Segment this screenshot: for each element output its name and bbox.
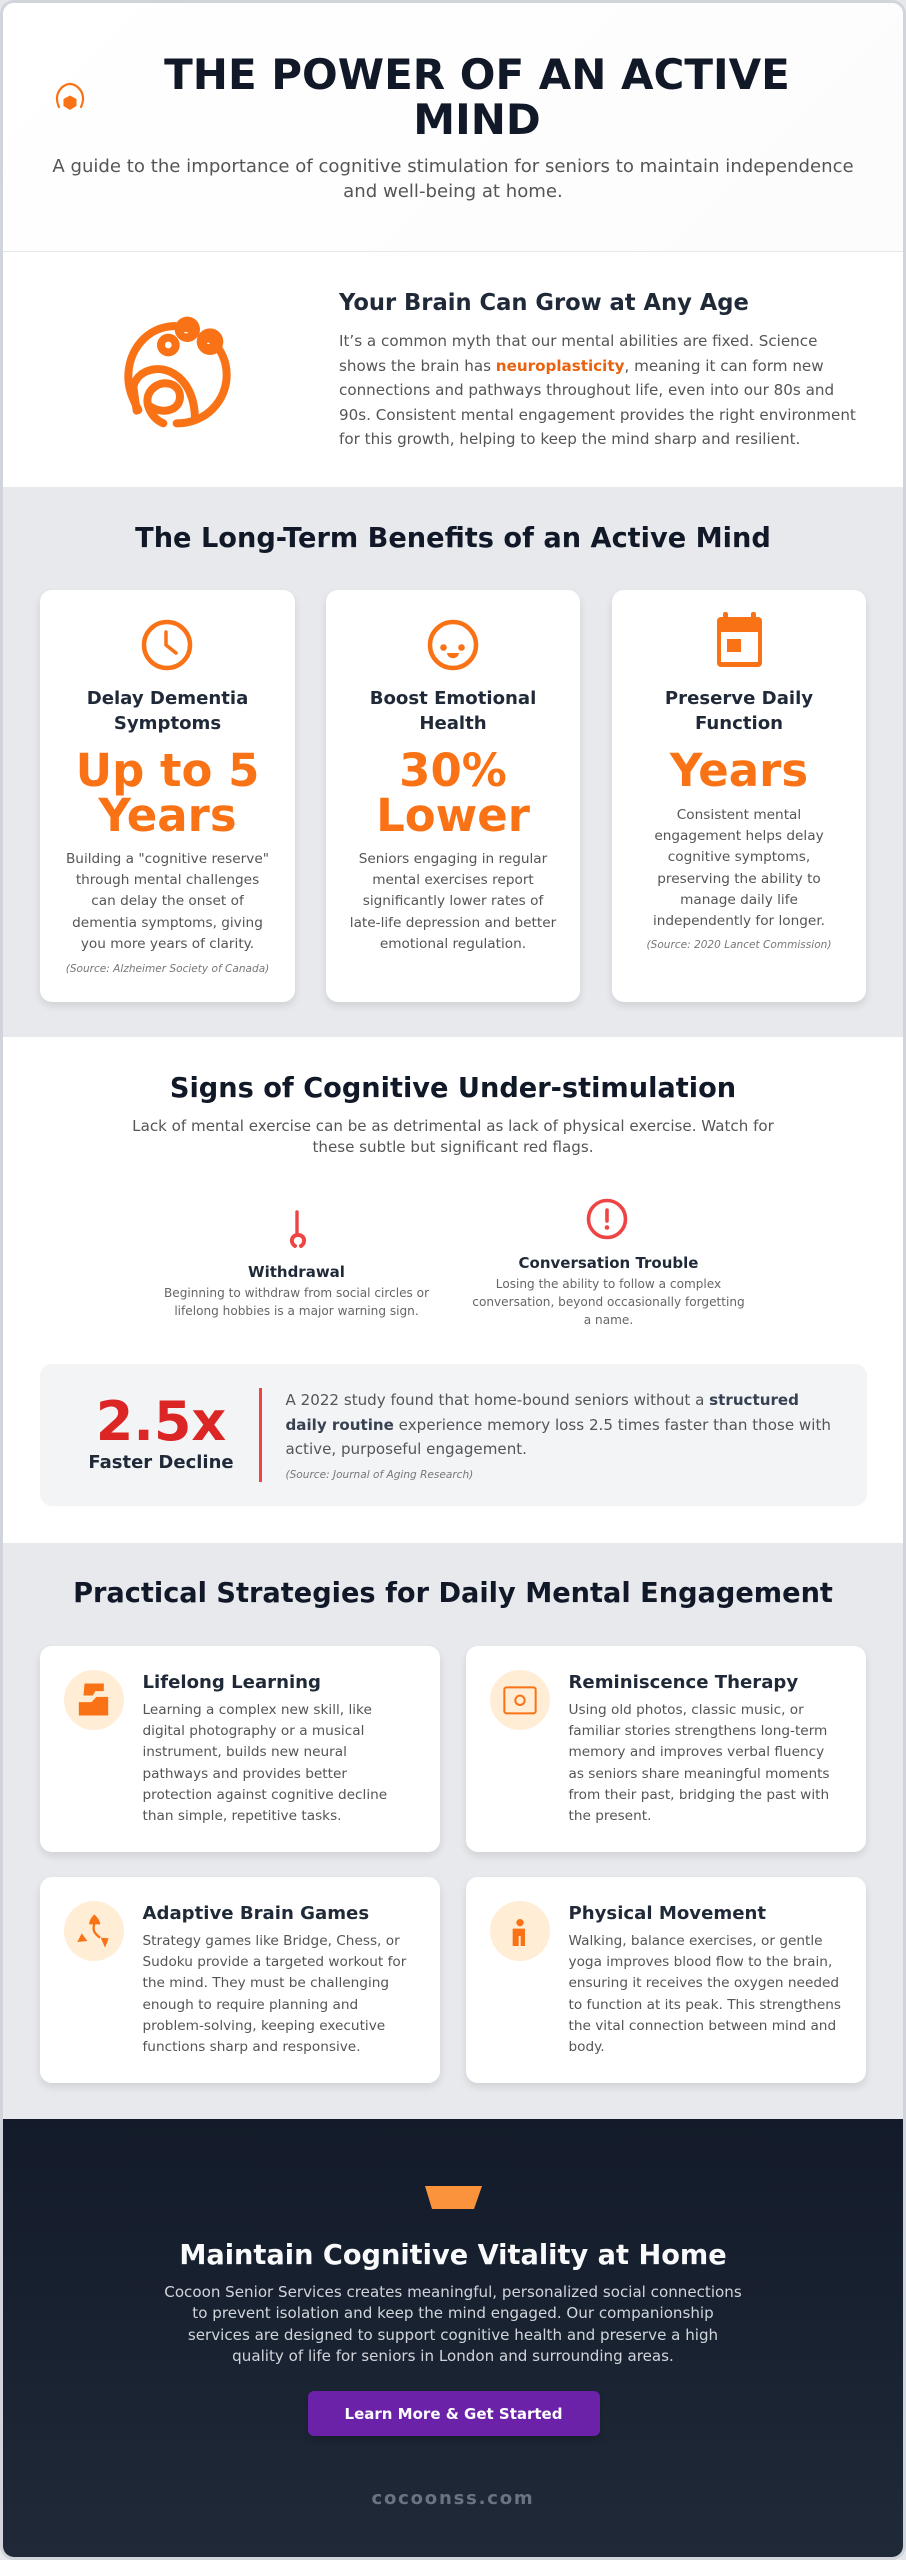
stat <box>376 744 530 842</box>
card: brain games <box>40 1877 440 2083</box>
heading: Practical Strategies for Daily Mental Engagement <box>73 1578 833 1609</box>
card title: Function <box>695 712 783 734</box>
panel: signs of under-stimulation <box>3 1037 903 1543</box>
description <box>142 1702 387 1824</box>
description: familiar stories strengthens long-term <box>568 1723 827 1739</box>
sign description: Losing the ability to follow a complex <box>496 1277 721 1291</box>
website: cocoonss.com <box>372 2488 534 2509</box>
card: daily function <box>612 590 866 1002</box>
panel: brain can grow <box>3 252 903 487</box>
card: reminiscence therapy <box>466 1646 866 1852</box>
description: functions sharp and responsive. <box>142 2039 361 2055</box>
icon: brain <box>124 316 231 428</box>
stat: Up to 5 <box>76 744 259 797</box>
paragraph: It’s a common myth that our mental abilities are fixed. Science <box>339 332 817 350</box>
card title: Adaptive Brain Games <box>142 1902 369 1924</box>
description: Learning a complex new skill, like <box>142 1702 372 1718</box>
paragraph: for this growth, helping to keep the mind sharp and resilient. <box>339 430 800 448</box>
sign: withdrawal <box>164 1210 430 1318</box>
source: (Source: Alzheimer Society of Canada) <box>66 963 269 975</box>
card title: Boost Emotional <box>370 688 536 709</box>
study text: daily routine experience memory loss 2.5 times faster than those with <box>286 1416 831 1434</box>
paragraph: services are designed to support cognitive health and preserve a high <box>188 2326 718 2344</box>
subtitle: and well-being at home. <box>343 180 563 202</box>
heading: Signs of Cognitive Under-stimulation <box>170 1073 736 1104</box>
description: Walking, balance exercises, or gentle <box>568 1933 823 1949</box>
description: significantly lower rates of <box>363 893 543 909</box>
description: Sudoku provide a targeted workout for <box>142 1954 406 1970</box>
icon: alert <box>586 1198 628 1240</box>
divider <box>259 1388 262 1482</box>
study text: active, purposeful engagement. <box>286 1440 527 1458</box>
sign description <box>472 1277 745 1327</box>
sign: conversation trouble <box>472 1198 745 1327</box>
description: emotional regulation. <box>380 936 526 952</box>
paragraph: quality of life for seniors in London and surrounding areas. <box>232 2347 674 2365</box>
description: Building a "cognitive reserve" <box>66 851 269 867</box>
heading: The Long-Term Benefits of an Active Mind <box>135 523 771 554</box>
source: (Source: Journal of Aging Research) <box>286 1469 473 1481</box>
description: Seniors engaging in regular <box>359 851 547 867</box>
sign description <box>164 1286 430 1318</box>
icon: photo <box>490 1670 550 1730</box>
panel: header <box>3 3 903 252</box>
subtitle: A guide to the importance of cognitive stimulation for seniors to maintain independence <box>52 156 854 177</box>
icon: withdrawal <box>290 1210 306 1248</box>
heading: Maintain Cognitive Vitality at Home <box>179 2240 727 2271</box>
description: Consistent mental <box>677 807 801 823</box>
title: MIND <box>413 95 541 144</box>
card title <box>370 688 536 734</box>
sign title: Withdrawal <box>248 1263 345 1281</box>
description: mental exercises report <box>372 872 534 888</box>
intro text: Lack of mental exercise can be as detrimental as lack of physical exercise. Watch for <box>132 1117 774 1135</box>
intro text <box>132 1117 774 1156</box>
paragraph <box>164 2283 742 2365</box>
description: to function at its peak. This strengthens <box>568 1997 841 2013</box>
description: yoga improves blood flow to the brain, <box>568 1954 832 1970</box>
callout: faster decline <box>40 1364 867 1506</box>
card: delay dementia <box>40 590 295 1002</box>
description: ensuring it receives the oxygen needed <box>568 1975 839 1991</box>
study text: A 2022 study found that home-bound seniors without a structured <box>286 1391 799 1409</box>
description: you more years of clarity. <box>81 936 254 952</box>
sign description: Beginning to withdraw from social circles or <box>164 1286 429 1300</box>
description: late-life depression and better <box>350 915 556 931</box>
description: memory and improves verbal fluency <box>568 1744 824 1760</box>
description: Using old photos, classic music, or <box>568 1702 804 1718</box>
description <box>142 1933 406 2055</box>
description: dementia symptoms, giving <box>72 915 263 931</box>
study text <box>286 1391 831 1458</box>
card title: Symptoms <box>114 712 221 734</box>
description: through mental challenges <box>76 872 259 888</box>
description <box>66 851 269 952</box>
description: engagement helps delay <box>654 828 824 844</box>
card title: Reminiscence Therapy <box>568 1672 798 1692</box>
card: emotional health <box>326 590 580 1002</box>
description: the vital connection between mind and <box>568 2018 836 2034</box>
stat <box>76 744 259 842</box>
description <box>653 807 825 929</box>
button <box>308 2391 600 2436</box>
icon: clock <box>142 620 192 670</box>
description: from their past, bridging the past with <box>568 1787 829 1803</box>
stat: Years <box>670 744 808 797</box>
paragraph <box>339 332 856 448</box>
description: the mind. They must be challenging <box>142 1975 389 1991</box>
description: cognitive symptoms, <box>668 849 810 865</box>
card title: Physical Movement <box>568 1902 766 1924</box>
description <box>568 1702 830 1824</box>
sign description: conversation, beyond occasionally forgetting <box>472 1295 745 1309</box>
stat label: Faster Decline <box>88 1452 234 1473</box>
panel: practical strategies <box>3 1543 903 2119</box>
description <box>568 1933 841 2055</box>
description: than simple, repetitive tasks. <box>142 1808 342 1824</box>
icon: trapezoid <box>425 2186 482 2209</box>
description <box>350 851 556 952</box>
paragraph: shows the brain has neuroplasticity, meaning it can form new <box>339 356 824 374</box>
stat: Lower <box>376 788 530 842</box>
card title <box>87 688 248 734</box>
icon: smile <box>428 620 478 670</box>
card title <box>665 688 813 734</box>
panel: call to action <box>3 2119 903 2557</box>
description: instrument, builds new neural <box>142 1744 347 1760</box>
stat: 30% <box>399 744 507 797</box>
source: (Source: 2020 Lancet Commission) <box>647 939 831 951</box>
description: Strategy games like Bridge, Chess, or <box>142 1933 400 1949</box>
card: physical movement <box>466 1877 866 2083</box>
icon: book <box>64 1670 124 1730</box>
description: pathways and provides better <box>142 1766 347 1782</box>
sign title: Conversation Trouble <box>519 1254 698 1272</box>
paragraph: Cocoon Senior Services creates meaningful, personalized social connections <box>164 2283 742 2301</box>
paragraph: to prevent isolation and keep the mind engaged. Our companionship <box>192 2304 714 2322</box>
intro text: these subtle but significant red flags. <box>312 1138 594 1156</box>
card title: Preserve Daily <box>665 688 813 709</box>
subtitle <box>52 156 854 202</box>
description: enough to require planning and <box>142 1997 358 2013</box>
description: problem-solving, keeping executive <box>142 2018 385 2034</box>
stat: Years <box>98 788 237 842</box>
title: THE POWER OF AN ACTIVE <box>164 50 790 99</box>
card title: Delay Dementia <box>87 688 248 709</box>
description: digital photography or a musical <box>142 1723 364 1739</box>
icon: calendar <box>717 612 762 667</box>
paragraph: 90s. Consistent mental engagement provides the right environment <box>339 406 856 424</box>
sign description: lifelong hobbies is a major warning sign. <box>174 1304 419 1318</box>
description: independently for longer. <box>653 913 825 929</box>
description: manage daily life <box>680 892 798 908</box>
description: body. <box>568 2039 605 2055</box>
panel: long-term benefits <box>3 487 903 1037</box>
button: Learn More & Get Started <box>345 2405 562 2423</box>
title <box>164 50 790 144</box>
description: protection against cognitive decline <box>142 1787 387 1803</box>
description: preserving the ability to <box>657 871 821 887</box>
card: lifelong learning <box>40 1646 440 1852</box>
paragraph: connections and pathways throughout life, even into our 80s and <box>339 381 834 399</box>
stat: 2.5x <box>96 1390 226 1453</box>
heading: Your Brain Can Grow at Any Age <box>339 290 749 316</box>
icon: header logo <box>56 82 84 110</box>
icon: person <box>490 1901 550 1961</box>
description: can delay the onset of <box>91 893 244 909</box>
sign description: a name. <box>584 1313 633 1327</box>
icon: puzzle <box>64 1901 124 1961</box>
card title: Lifelong Learning <box>142 1672 321 1692</box>
description: the present. <box>568 1808 651 1824</box>
description: as seniors share meaningful moments <box>568 1766 830 1782</box>
card title: Health <box>419 712 487 734</box>
